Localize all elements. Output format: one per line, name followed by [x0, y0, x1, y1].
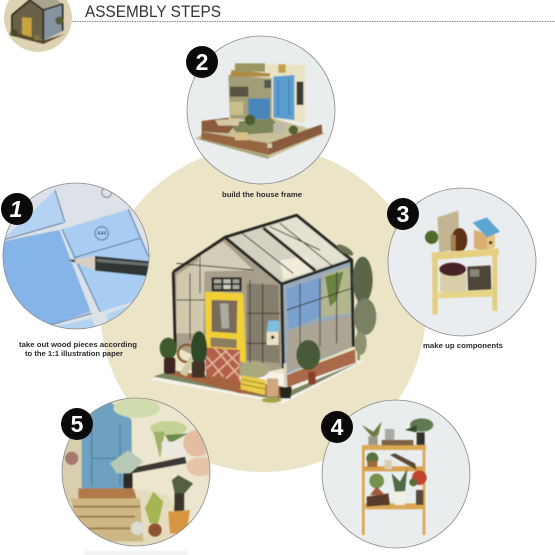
beige background circle	[100, 146, 426, 472]
badge: number 2: 2	[196, 49, 208, 75]
badge: number 1	[1, 193, 33, 225]
caption: step 3: make up components	[423, 341, 503, 350]
caption: step 1: to the 1:1 illustration paper	[25, 349, 123, 358]
badge: number 3: 3	[397, 201, 409, 227]
badge: number 5	[61, 408, 93, 440]
main greenhouse illustration	[149, 215, 376, 403]
badge: number 3	[387, 198, 419, 230]
badge: number 2	[186, 46, 218, 78]
caption: step 5 (cropped, faint)	[84, 551, 188, 555]
badge: number 1: 1	[10, 196, 22, 222]
panel: step 3	[388, 188, 536, 336]
caption: step 1	[19, 340, 137, 358]
badge: number 4	[321, 411, 353, 443]
panel: step 2	[187, 36, 335, 184]
badge: number 4: 4	[331, 414, 344, 440]
panel: step 5	[60, 398, 213, 546]
caption: step 2: build the house frame	[222, 190, 302, 199]
caption: step 1: take out wood pieces according	[19, 340, 137, 349]
header thumbnail: greenhouse	[4, 0, 72, 52]
panel: step 1: A44	[97, 231, 106, 237]
panel: step 1	[0, 183, 153, 337]
badge: number 5: 5	[71, 411, 84, 437]
title: ASSEMBLY STEPS	[85, 2, 221, 21]
panel: step 4	[322, 400, 470, 548]
